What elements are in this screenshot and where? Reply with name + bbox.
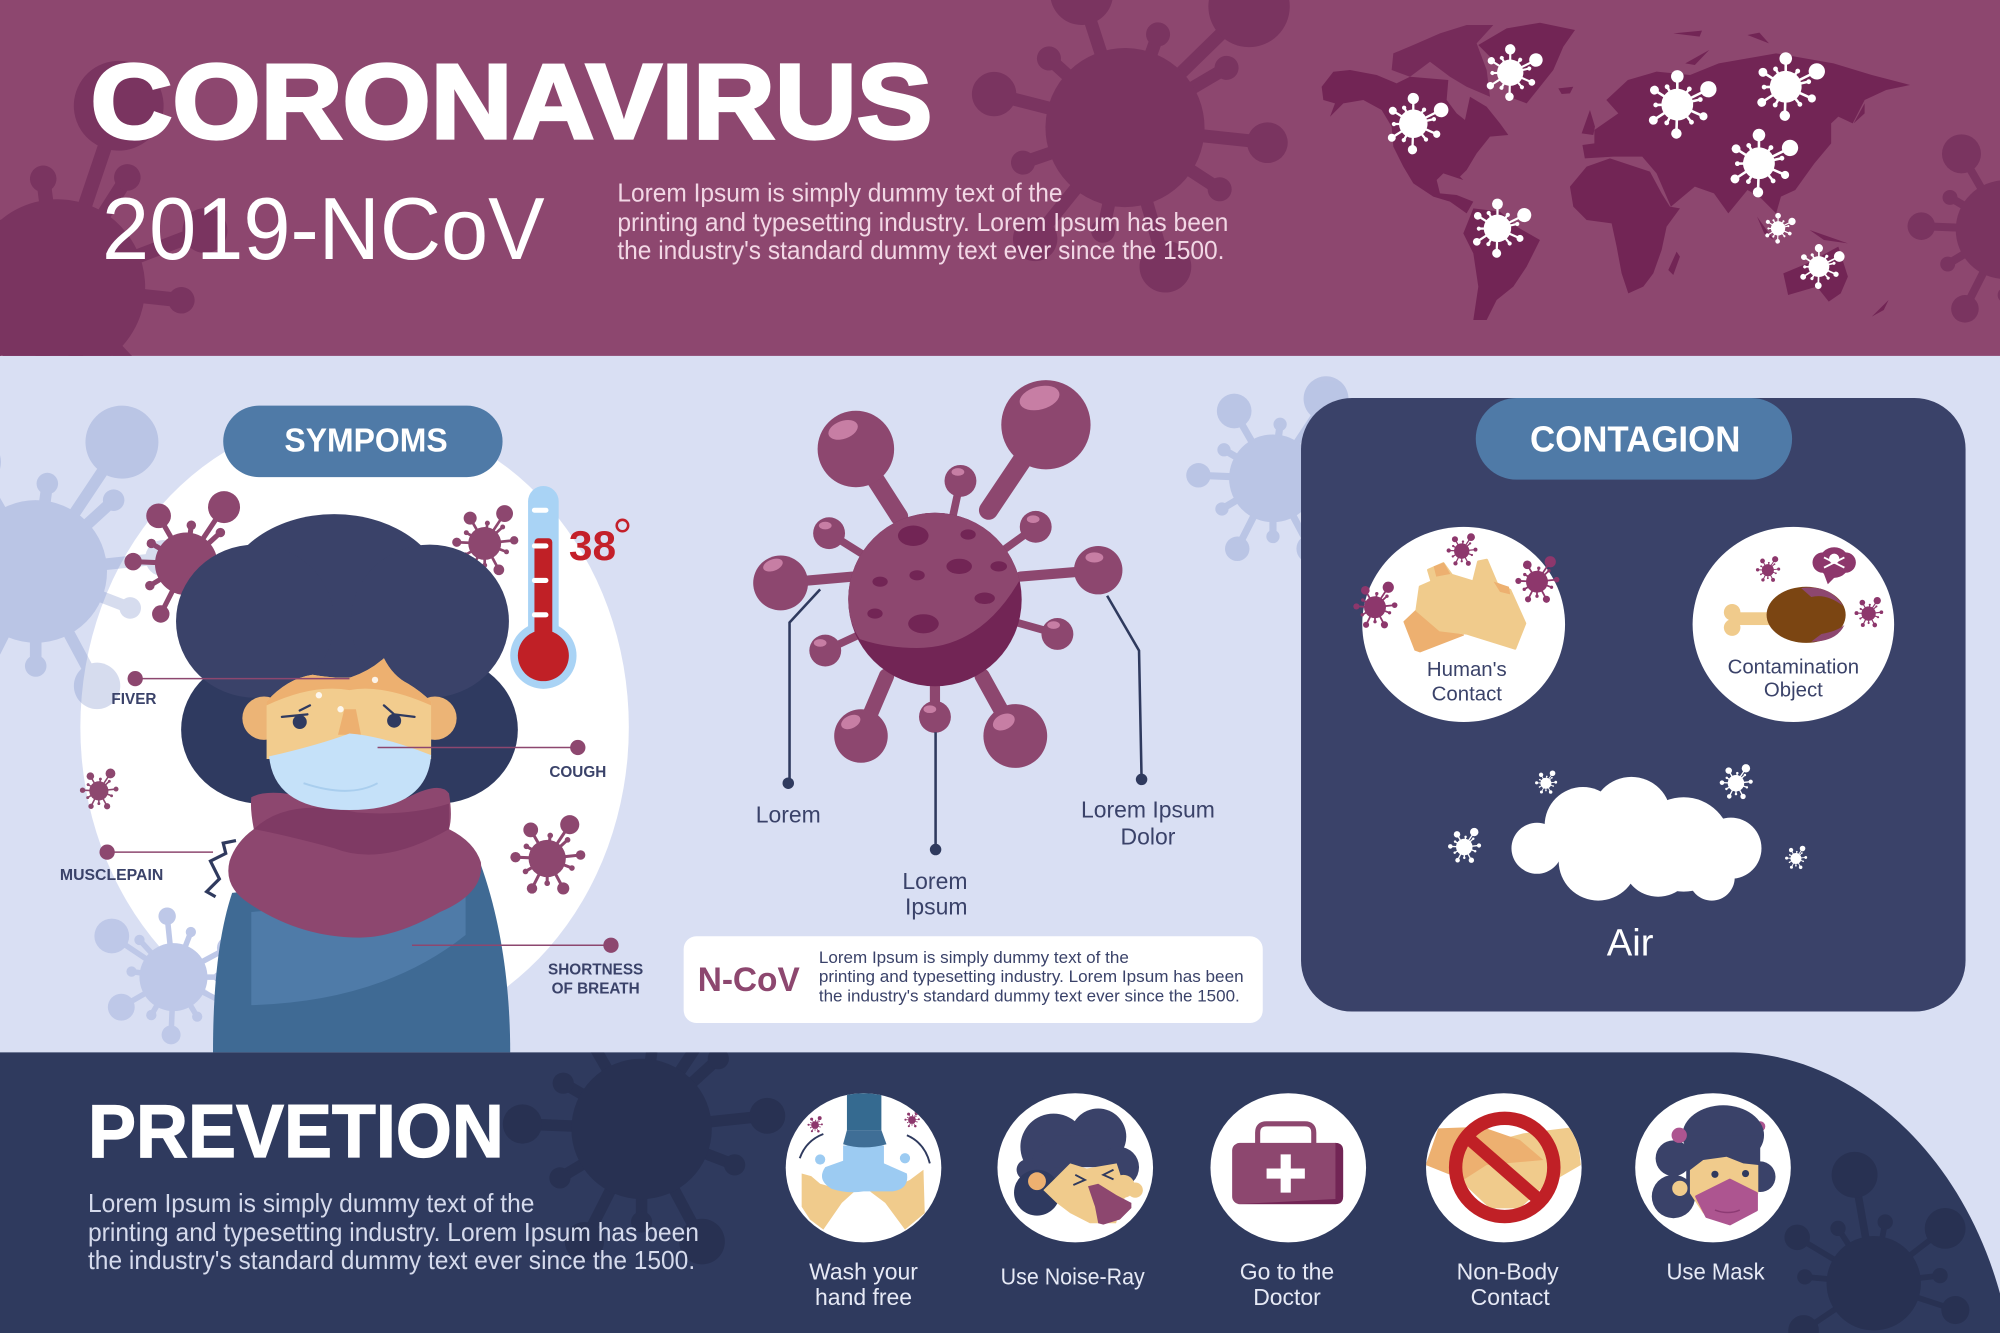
icon: air cloud — [1511, 777, 1761, 901]
background virus left — [0, 406, 182, 709]
icon: virus by thermometer — [452, 505, 518, 575]
symptom: cough: COUGH — [549, 764, 606, 781]
header paragraph: Lorem Ipsum is simply dummy text of the — [617, 180, 1062, 208]
human contact circle: Contact — [1432, 683, 1502, 705]
icon: girl with mask — [1635, 1093, 1791, 1242]
icon: hands — [1404, 560, 1525, 652]
ears — [242, 696, 457, 740]
prevention labels: Non-Body — [1457, 1258, 1559, 1284]
white ellipse backdrop — [80, 415, 629, 1040]
contamination object circle — [1693, 527, 1894, 722]
contamination object circle: Object — [1764, 679, 1823, 701]
icon: wash hands — [786, 1093, 941, 1242]
prevention labels: Wash your — [809, 1258, 918, 1284]
spike balls — [753, 380, 1122, 768]
thermometer — [510, 486, 577, 689]
prevention paragraph: printing and typesetting industry. Lorem Ipsum has been — [88, 1219, 699, 1247]
icon: doctor kit — [1210, 1093, 1366, 1242]
prevention heading: PREVETION — [88, 1089, 504, 1173]
virus body — [848, 513, 1022, 686]
prevention labels: Use Mask — [1666, 1258, 1765, 1284]
subtitle: 2019-NCoV — [102, 179, 545, 278]
symptom: muscle pain: MUSCLEPAIN — [60, 867, 163, 884]
prevention labels: Go to the — [1240, 1258, 1334, 1284]
panel: header banner — [0, 0, 2000, 356]
icons: air viruses — [1448, 764, 1807, 869]
prevention labels — [809, 1258, 1765, 1310]
main virus diagram — [753, 380, 1215, 920]
prevention paragraph: the industry's standard dummy text ever since the 1500. — [88, 1247, 695, 1275]
icon: cover nose and mouth — [997, 1093, 1153, 1242]
background virus lower left — [94, 908, 239, 1044]
face mask — [269, 733, 431, 810]
symptom: shortness of breath: SHORTNESS — [548, 962, 643, 979]
prevention labels: Doctor — [1253, 1284, 1321, 1310]
N-CoV text: printing and typesetting industry. Lorem Ipsum has been — [819, 967, 1244, 986]
symptom: shortness of breath — [412, 938, 643, 998]
icon: virus near hair — [124, 491, 250, 624]
icon: pain lightning — [207, 841, 236, 897]
background virus motifs in header — [0, 0, 2000, 356]
background virus, middle — [1186, 376, 1363, 563]
icon: drumstick — [1724, 587, 1846, 643]
symptom: cough — [378, 740, 606, 781]
scarf — [228, 788, 481, 938]
upper hair — [176, 514, 509, 698]
contamination object circle: Contamination — [1728, 657, 1859, 679]
prevention labels: Contact — [1471, 1284, 1550, 1310]
label: lorem: Lorem — [756, 802, 821, 828]
panel: contagion — [1301, 398, 1966, 1012]
icon: no handshake — [1426, 1093, 1582, 1242]
header paragraph: the industry's standard dummy text ever since the 1500. — [617, 237, 1224, 265]
prevention labels: hand free — [815, 1284, 912, 1310]
pill heading: contagion: CONTAGION — [1530, 420, 1740, 460]
title: CORONAVIRUS — [91, 43, 932, 161]
human contact circle: Human's — [1427, 659, 1507, 681]
eyes — [282, 705, 415, 729]
icon: poison cloud — [1812, 547, 1856, 584]
sweat drops — [316, 677, 378, 712]
N-CoV text: Lorem Ipsum is simply dummy text of the — [819, 948, 1129, 967]
callout lines — [790, 589, 1142, 850]
lower hair — [181, 656, 518, 804]
world map with virus markers — [1322, 23, 1910, 320]
callout dots — [783, 774, 1147, 855]
prevention paragraph: Lorem Ipsum is simply dummy text of the — [88, 1190, 534, 1218]
panel: symptoms — [0, 406, 643, 1052]
panel: prevention footer — [0, 1052, 2000, 1333]
pill heading: symptoms: SYMPOMS — [284, 423, 448, 460]
N-CoV text: the industry's standard dummy text ever since the 1500. — [819, 986, 1240, 1005]
label: lorem ipsum: Lorem — [902, 868, 967, 894]
icon: small virus left — [80, 769, 118, 809]
symptom: muscle pain — [60, 844, 213, 884]
temperature label: 38 — [569, 522, 616, 569]
pill heading: contagion — [1476, 398, 1792, 480]
symptom: shortness of breath: OF BREATH — [552, 981, 640, 998]
N-CoV heading: N-CoV — [698, 961, 800, 999]
label: lorem ipsum: Ipsum — [905, 894, 967, 920]
spikes — [781, 425, 1098, 736]
label: lorem ipsum dolor: Dolor — [1121, 823, 1176, 849]
craters — [867, 526, 1007, 633]
body — [213, 865, 510, 1052]
human contact circle — [1353, 527, 1565, 722]
ball highlights — [761, 382, 1103, 734]
prevention labels: Use Noise-Ray — [1001, 1264, 1145, 1290]
label: air: Air — [1607, 921, 1654, 964]
face — [267, 658, 431, 759]
panel: N-CoV note — [684, 936, 1263, 1023]
symptom: fever: FIVER — [111, 691, 156, 708]
symptom: fever — [111, 671, 349, 708]
sick person illustration — [176, 514, 518, 1052]
label: lorem ipsum dolor: Lorem Ipsum — [1081, 797, 1215, 823]
background viruses in footer — [503, 1052, 1970, 1333]
icon: virus right — [510, 815, 585, 894]
header paragraph: printing and typesetting industry. Lorem Ipsum has been — [617, 209, 1228, 237]
pill heading: symptoms — [223, 406, 503, 477]
